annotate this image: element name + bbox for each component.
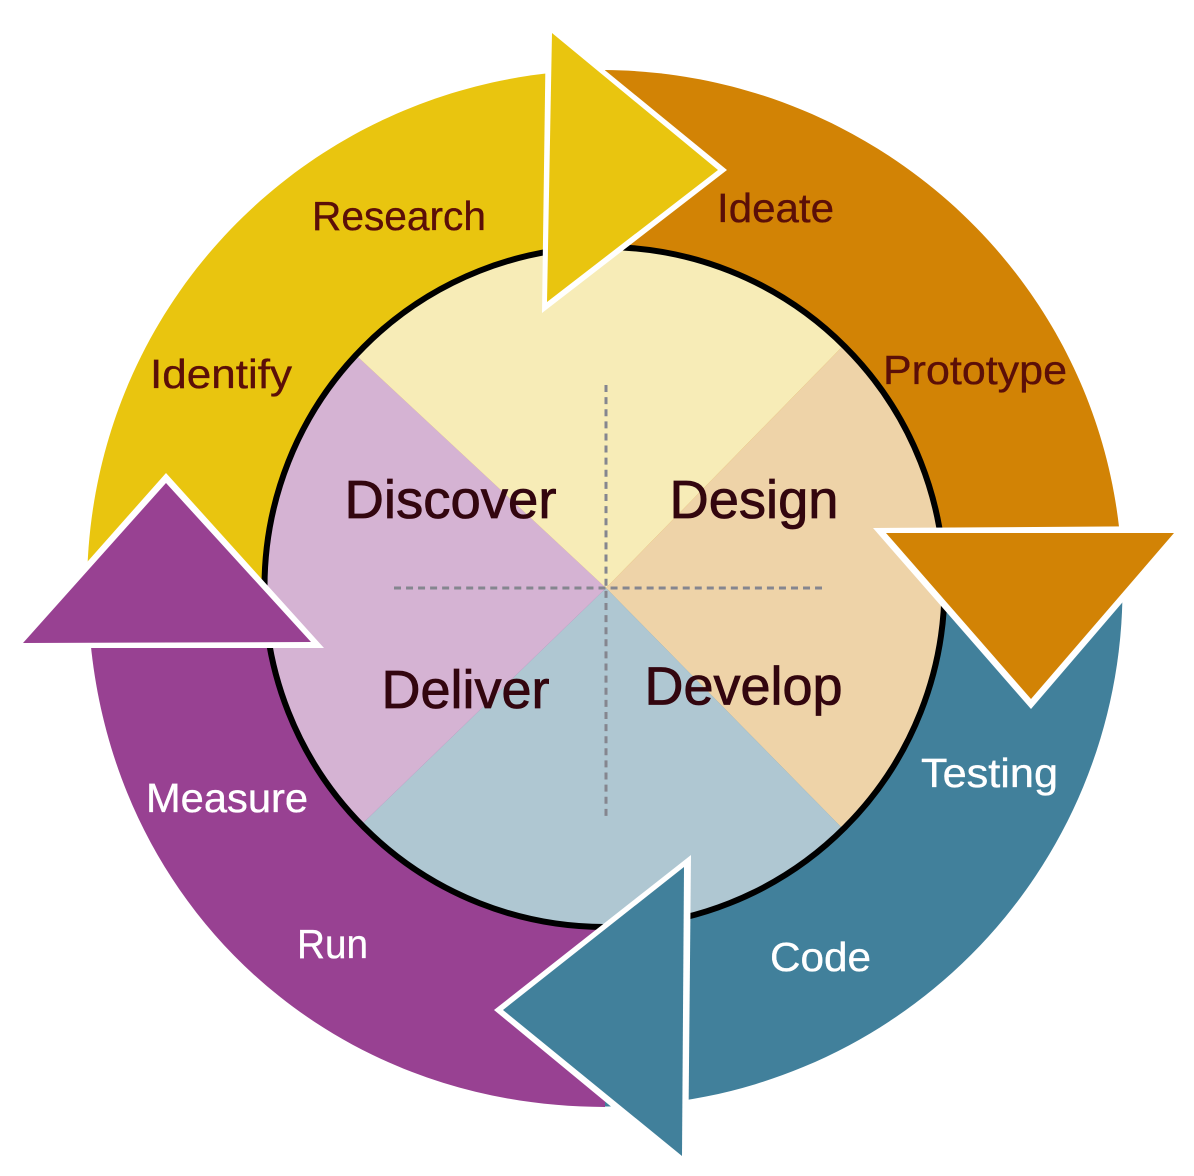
label: Code: Code — [770, 934, 871, 980]
wedge: deliver — [268, 357, 606, 822]
arrowhead: orange — [873, 526, 1188, 709]
arrowhead: purple — [11, 473, 324, 648]
label: Identify: Identify — [150, 351, 293, 397]
label: Research: Research — [312, 193, 486, 239]
outer ring segment: teal — [605, 588, 1123, 1106]
heading: Develop: Develop — [644, 658, 842, 716]
arrowhead: yellow — [542, 22, 727, 313]
label: Testing: Testing — [921, 750, 1058, 796]
wedge: develop — [364, 588, 841, 924]
dashed cross — [394, 385, 822, 816]
outer ring segment: yellow — [87, 70, 605, 588]
label: Ideate: Ideate — [717, 185, 834, 231]
outer ring segment: purple — [88, 588, 605, 1107]
label: Prototype: Prototype — [883, 347, 1067, 393]
label: Run: Run — [297, 921, 368, 967]
label: Measure: Measure — [146, 775, 308, 821]
wedge: design — [606, 348, 941, 827]
wedge: discover — [358, 250, 842, 588]
outer ring segment: orange — [605, 70, 1123, 588]
heading: Discover: Discover — [344, 471, 556, 530]
arrowhead: teal — [494, 855, 691, 1170]
heading: Deliver: Deliver — [382, 661, 550, 720]
inner circle quadrants — [268, 250, 941, 924]
heading: Design: Design — [670, 471, 838, 530]
black ring — [264, 247, 944, 927]
